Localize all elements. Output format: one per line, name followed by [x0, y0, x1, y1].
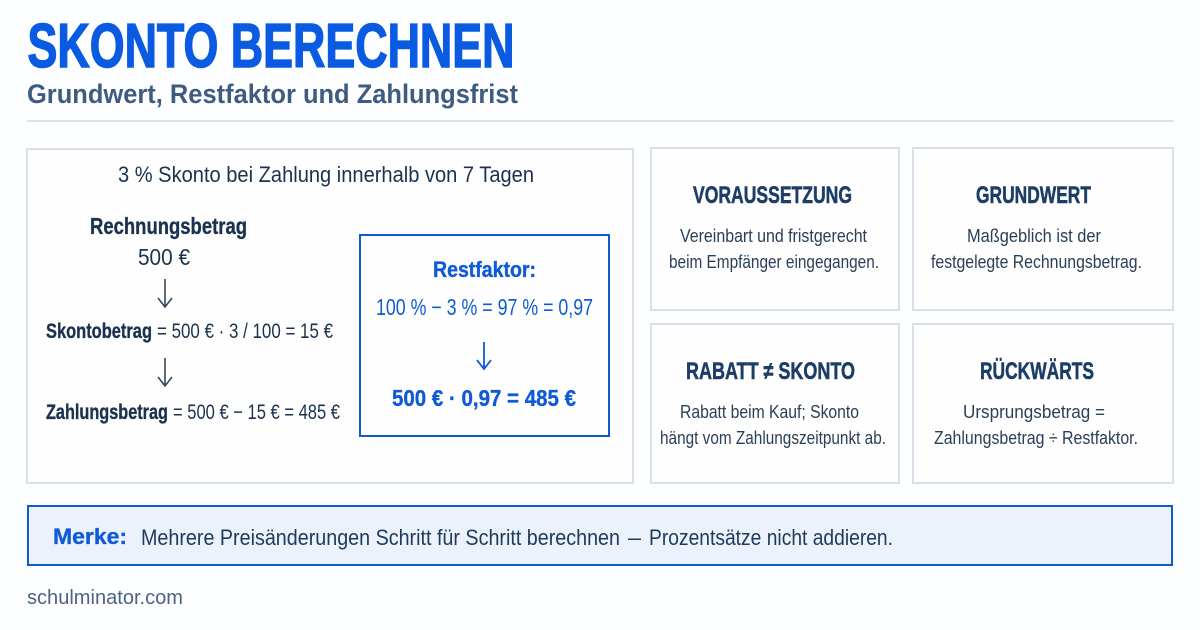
card heading: RÜCKWÄRTS [980, 358, 1094, 385]
card heading: GRUNDWERT [976, 182, 1091, 209]
panel: Skonto example [27, 149, 633, 483]
formula: Skontobetrag: = 500 € · 3 / 100 = 15 € [157, 320, 333, 343]
Merke label: Merke: [53, 524, 127, 549]
card text [934, 401, 1138, 448]
arrow: callout down [477, 342, 491, 369]
card text: Rabatt beim Kauf; Skonto [680, 401, 859, 422]
value: 500 euro: 500 € [138, 244, 190, 270]
callout result: 500 € · 0,97 = 485 € [392, 385, 576, 411]
card heading: VORAUSSETZUNG [693, 182, 852, 209]
card text [931, 225, 1142, 272]
card: Rueckwaerts [913, 324, 1173, 483]
callout heading: Restfaktor: [433, 257, 536, 282]
callout formula: 100 % − 3 % = 97 % = 0,97 [376, 294, 593, 320]
card text: hängt vom Zahlungszeitpunkt ab. [660, 427, 886, 448]
card text: beim Empfänger eingegangen. [669, 251, 879, 272]
card text: festgelegte Rechnungsbetrag. [931, 251, 1142, 272]
Merke text: Mehrere Preisänderungen Schritt für Schritt berechnen [141, 525, 620, 550]
card text: Zahlungsbetrag ÷ Restfaktor. [934, 427, 1138, 448]
card text: Maßgeblich ist der [967, 225, 1101, 246]
card text: Vereinbart und fristgerecht [680, 225, 867, 246]
footer: schulminator.com [27, 587, 183, 609]
card: Grundwert [913, 148, 1173, 310]
arrow: down 2 [158, 358, 172, 386]
card text: Ursprungsbetrag = [963, 401, 1105, 422]
callout: Merke [28, 506, 1172, 565]
card text [669, 225, 879, 272]
card heading: RABATT ≠ SKONTO [686, 358, 855, 385]
formula: Skontobetrag: Skontobetrag [46, 320, 152, 343]
formula: Zahlungsbetrag: = 500 € − 15 € = 485 € [173, 401, 340, 424]
title: SKONTO BERECHNEN [28, 11, 514, 81]
panel heading: 3 % Skonto bei Zahlung innerhalb von 7 Tagen [118, 162, 534, 187]
formula: Zahlungsbetrag: Zahlungsbetrag [46, 401, 168, 424]
card: Voraussetzung [651, 148, 899, 310]
label: Rechnungsbetrag: Rechnungsbetrag [90, 213, 247, 239]
card text [660, 401, 886, 448]
callout: Restfaktor [360, 235, 609, 436]
formula: Skontobetrag [46, 320, 333, 343]
Merke text: — [628, 525, 641, 550]
Merke text: Prozentsätze nicht addieren. [649, 525, 893, 550]
card: Rabatt vs. Skonto [651, 324, 899, 483]
formula: Zahlungsbetrag [46, 401, 340, 424]
arrow: down 1 [158, 279, 172, 307]
subtitle: Grundwert, Restfaktor und Zahlungsfrist [27, 79, 518, 109]
